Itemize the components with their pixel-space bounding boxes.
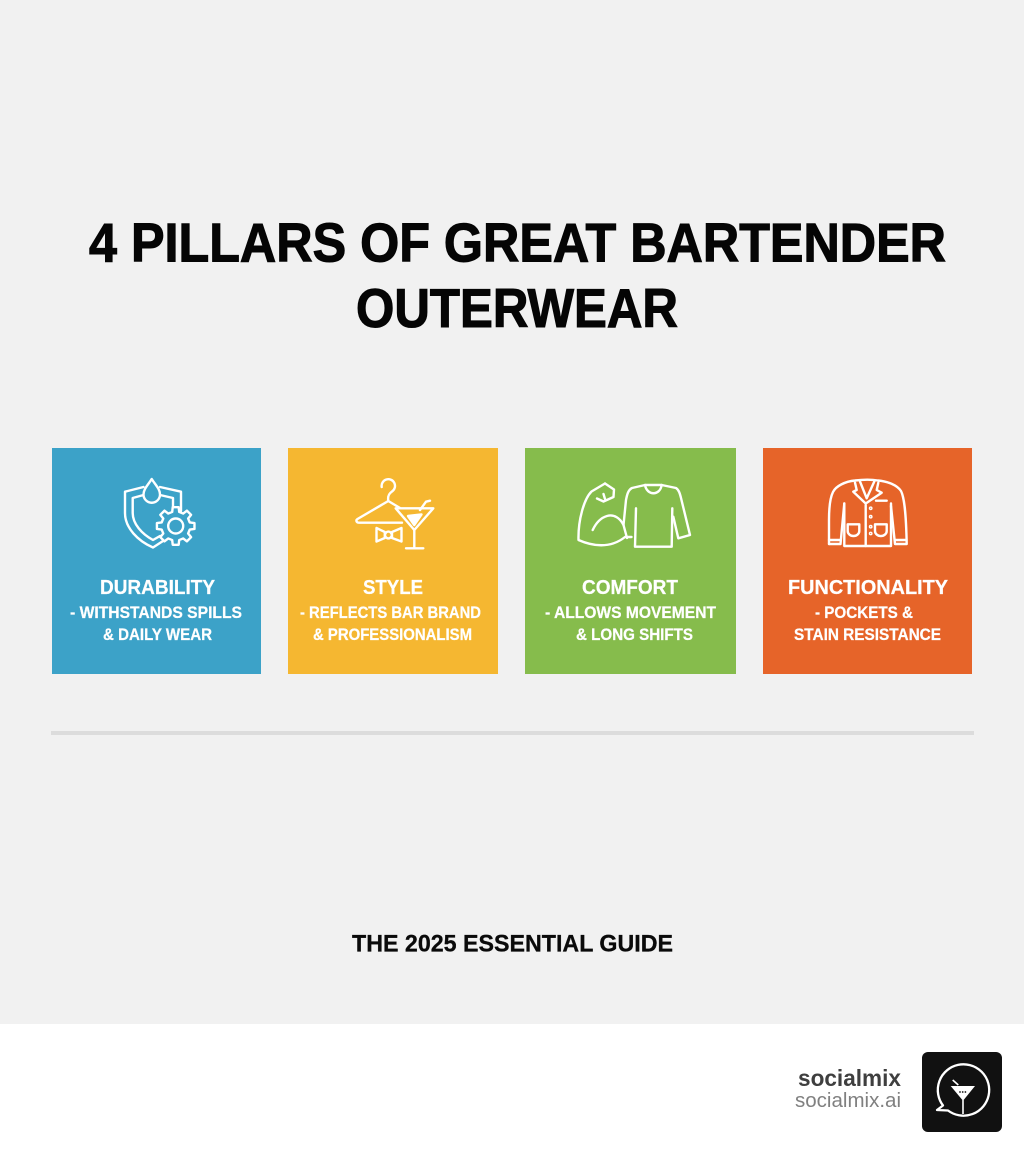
panel: style	[288, 448, 498, 674]
text: style: & PROFESSIONALISM	[313, 626, 472, 644]
brand name: socialmix	[798, 1065, 901, 1091]
brand name	[795, 1065, 901, 1112]
text: comfort: COMFORT	[582, 576, 678, 599]
text: functionality: - POCKETS &	[815, 604, 913, 622]
icon: shield with drop and gear	[125, 479, 194, 548]
text: comfort: & LONG SHIFTS	[576, 626, 693, 644]
icon: jacket	[829, 480, 907, 546]
text: functionality: STAIN RESISTANCE	[794, 626, 941, 644]
panel: comfort	[525, 448, 736, 674]
title: 4 PILLARS OF GREAT BARTENDER	[89, 212, 946, 274]
text: style: - REFLECTS BAR BRAND	[300, 604, 481, 622]
text: durability	[70, 576, 242, 644]
subtitle: THE 2025 ESSENTIAL GUIDE	[352, 930, 673, 958]
text: durability: DURABILITY	[100, 576, 215, 599]
panel: durability	[52, 448, 261, 674]
text: durability: - WITHSTANDS SPILLS	[70, 604, 242, 622]
title: OUTERWEAR	[356, 277, 678, 339]
text: functionality: FUNCTIONALITY	[788, 576, 948, 599]
logo	[922, 1052, 1002, 1132]
icon: flexed arm and sweater	[578, 484, 690, 547]
brand name: socialmix.ai	[795, 1090, 901, 1112]
title	[89, 212, 946, 339]
footer	[0, 1024, 1024, 1154]
text: durability: & DAILY WEAR	[103, 626, 212, 644]
icon: hanger, bow tie and martini	[356, 479, 433, 548]
text: comfort: - ALLOWS MOVEMENT	[545, 604, 716, 622]
text: style: STYLE	[363, 576, 423, 599]
text: functionality	[788, 576, 948, 644]
text: style	[300, 576, 481, 644]
panel: functionality	[763, 448, 972, 674]
text: comfort	[545, 576, 716, 644]
